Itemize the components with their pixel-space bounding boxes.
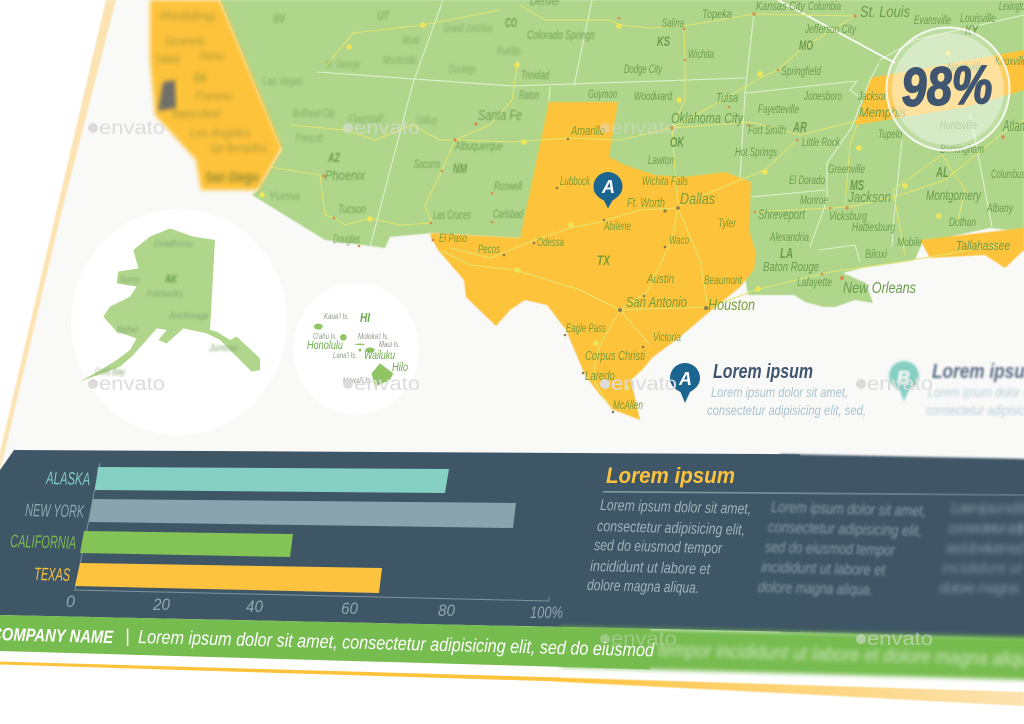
map labels: central and southeast: Vicksburg (829, 211, 867, 223)
text column 2: incididunt ut labore et (761, 559, 886, 579)
blurred map labels: interior west (263, 8, 521, 203)
Alaska labels: Bethel (117, 325, 139, 336)
map labels: central and southeast: AR (792, 119, 807, 136)
map labels: central and southeast: Jackson (847, 189, 891, 206)
map labels: Texas (439, 123, 755, 412)
map labels: Texas: Waco (669, 235, 689, 247)
blurred map labels: interior west: Prescott (296, 131, 323, 145)
map labels: Texas: Houston (708, 297, 755, 314)
map labels: southwest (325, 0, 595, 246)
icon: grey bay blob (158, 80, 176, 111)
map labels: central and southeast: Albany (986, 203, 1014, 215)
map labels: central and southeast: Alexandria (769, 232, 809, 244)
blurred map labels: interior west: Yuma (268, 189, 300, 203)
icon: map pin A: A (601, 177, 615, 197)
blurred map labels: California and Nevada: San Diego (205, 169, 259, 186)
legend description: consectetur adipisicing elit, sed, (707, 402, 866, 418)
Hawaii labels: Moloka'i Is. (358, 331, 389, 341)
Alaska shape (80, 228, 260, 382)
blurred map labels: California and Nevada: Oakland (155, 52, 180, 66)
blurred map labels: interior west: Monticello (383, 53, 417, 67)
map labels: central and southeast: Montgomery (926, 187, 982, 203)
Texas city dots (503, 138, 708, 413)
map labels: central and southeast: Nashville (947, 62, 985, 74)
map labels: central and southeast: Mobile (897, 237, 922, 249)
map labels: central and southeast: Salina (662, 18, 684, 30)
blurred map labels: California and Nevada: Bakersfield (172, 107, 220, 121)
legend description (926, 384, 1024, 418)
land: green states (220, 0, 1024, 307)
map labels: central and southeast: Little Rock (802, 137, 841, 149)
map labels: central and southeast: Lafayette (797, 277, 832, 289)
text column 2: consectetur adipisicing elit, (768, 519, 922, 540)
axis tick labels: 40 (246, 597, 263, 616)
highway shields (259, 22, 951, 391)
map labels: southwest: Socorro (414, 159, 440, 171)
legend description: Lorem ipsum dolor sit amet, (711, 384, 848, 400)
blurred map labels: California and Nevada: Reno (200, 49, 225, 63)
map labels: southwest: Trinidad (521, 70, 549, 82)
state: Florida (920, 228, 1024, 268)
map labels: central and southeast: Woodward (634, 91, 672, 103)
axis tick labels (66, 592, 563, 622)
roads (270, 5, 1024, 410)
watermarks: envato (611, 374, 677, 395)
Alaska labels (95, 239, 238, 378)
map labels: Texas: San Antonio (626, 294, 687, 311)
map labels: Texas: Corpus Christi (585, 348, 646, 363)
text column 3: sed do eiusmod (945, 540, 1024, 557)
watermarks: envato (867, 629, 933, 650)
map labels: central and southeast: Oklahoma City (671, 110, 744, 127)
blurred map labels: interior west: Pueblo (497, 44, 521, 58)
blurred map labels: California and Nevada: Redding (160, 9, 215, 23)
city dots (322, 12, 1005, 280)
Hawaii labels: Lana'i Is. (333, 350, 357, 360)
panel: green footer band (0, 615, 1024, 680)
map labels: central and southeast: KS (657, 33, 670, 49)
axis tick labels: 100% (530, 603, 563, 622)
map labels: Texas: Ft. Worth (627, 195, 665, 210)
blurred map labels: California and Nevada: Los Angeles (190, 126, 250, 140)
map labels: central and southeast: MS (850, 177, 864, 194)
map labels: Texas: Dallas (680, 191, 715, 208)
Alaska labels: AK (164, 272, 178, 286)
legend item B (889, 361, 1024, 418)
legend description (707, 384, 866, 418)
blurred map labels: California and Nevada: San Bernardino (210, 141, 267, 155)
map labels: central and southeast: Baton Rouge (763, 259, 819, 274)
panel heading: Lorem ipsum (606, 463, 735, 488)
axis lines (75, 463, 549, 601)
state: Texas (430, 102, 756, 420)
state: California (150, 0, 282, 190)
map labels: central and southeast: Monroe (800, 195, 828, 207)
text column 2 (758, 499, 926, 599)
map labels: Texas: Abilene (603, 221, 631, 233)
map labels: central and southeast: Guymon (588, 89, 617, 101)
map labels: southwest: Albuquerque (454, 141, 503, 153)
legend item A (670, 361, 866, 418)
map labels: Texas: El Paso (439, 233, 467, 245)
axis tick labels: 80 (438, 601, 455, 620)
watermarks: envato (99, 374, 165, 395)
text column 1: sed do eiusmod tempor (594, 537, 723, 557)
watermarks: envato (354, 374, 420, 395)
panel: dark chart and text band (0, 450, 1024, 640)
map labels: central and southeast (588, 1, 1024, 297)
icon: legend pin B: B (897, 368, 910, 388)
Alaska labels: Cold Bay (95, 367, 126, 378)
state borders (317, 0, 1024, 262)
map labels: central and southeast: Hattiesburg (852, 222, 895, 234)
blurred map labels: interior west: Flagstaff (348, 112, 384, 126)
map labels: central and southeast: Lawton (648, 155, 674, 167)
map labels: central and southeast: Greenville (828, 164, 865, 176)
map labels: central and southeast: Louisville (960, 13, 996, 25)
map labels: central and southeast: El Dorado (789, 175, 825, 187)
map labels: central and southeast: Jefferson City (804, 24, 857, 36)
blurred map labels: California and Nevada: Sacramento (165, 34, 205, 48)
bar labels: TEXAS (34, 564, 70, 585)
Hawaii labels: Honolulu (307, 338, 343, 352)
map labels: southwest: CO (505, 15, 517, 30)
map labels: central and southeast: Columbia (808, 1, 841, 13)
Hawaii labels: O'ahu Is. (313, 331, 337, 341)
map labels: central and southeast: KY (965, 22, 979, 38)
map labels: central and southeast: Birmingham (940, 144, 984, 156)
map labels: central and southeast: Jonesboro (803, 91, 842, 103)
map labels: central and southeast: AL (935, 164, 949, 181)
text column 2: sed do eiusmod tempor (765, 539, 896, 559)
map: contiguous states (150, 0, 1024, 420)
blurred map labels: interior west: Durango (449, 62, 476, 76)
blurred map labels: interior west: UT (377, 8, 390, 23)
bar: Texas (75, 563, 382, 593)
map labels: central and southeast: St. Louis (860, 4, 910, 21)
map labels: Texas: TX (597, 252, 611, 268)
Hawaii labels: Hawai'i Is. (343, 375, 372, 385)
inset: Alaska (71, 209, 287, 435)
map labels: southwest: Phoenix (325, 167, 366, 183)
map labels: central and southeast: Springfield (781, 66, 821, 78)
blurred map labels: interior west: Grand Junction (443, 21, 493, 35)
text column 1: Lorem ipsum dolor sit amet, (600, 497, 751, 518)
map labels: southwest: NM (453, 160, 467, 176)
map labels: Texas: McAllen (613, 400, 643, 412)
map labels: central and southeast: Tupelo (878, 129, 902, 141)
bar labels: NEW YORK (25, 500, 85, 522)
axis tick labels: 60 (341, 599, 358, 618)
Alaska labels: Fairbanks (147, 289, 183, 300)
text column 1: consectetur adipisicing elit, (597, 518, 745, 539)
text column 3 (939, 500, 1024, 597)
callout: 98% magnifier (886, 28, 1010, 150)
map labels: central and southeast: Dodge City (624, 64, 663, 76)
map labels: central and southeast: OK (670, 134, 685, 151)
Hawaii labels: Wailuku (364, 348, 395, 362)
pointer line (778, 0, 895, 63)
map labels: central and southeast: Huntsville (940, 120, 977, 132)
page background (0, 0, 1024, 470)
map labels: central and southeast: MO (799, 37, 813, 53)
map labels: central and southeast: Fayetteville (758, 104, 799, 116)
map labels: Texas: Amarillo (570, 123, 605, 138)
text column 2: dolore magna aliqua. (758, 579, 873, 599)
watermarks: envato (611, 629, 677, 650)
map labels: Texas: Austin (646, 271, 674, 286)
Alaska labels: Juneau (208, 343, 238, 354)
map labels: southwest: Santa Fe (478, 107, 522, 124)
map labels: southwest: AZ (327, 150, 341, 165)
legend heading: Lorem ipsum (713, 361, 813, 383)
blurred map labels: California and Nevada (155, 9, 267, 186)
map labels: Texas: Victoria (653, 332, 681, 344)
bar labels (10, 468, 90, 585)
watermarks (88, 118, 933, 650)
text column 3: incididunt ut (942, 560, 1023, 577)
map labels: central and southeast: Topeka (702, 9, 732, 21)
icon: map pin A (594, 172, 622, 208)
map labels: southwest: Las Cruces (433, 210, 471, 222)
map labels: southwest: Tucson (338, 204, 366, 216)
map labels: central and southeast: Tulsa (716, 90, 738, 105)
map labels: Texas: Odessa (537, 237, 564, 249)
map labels: central and southeast: Wichita (688, 49, 714, 61)
map labels: Texas: Wichita Falls (642, 176, 688, 188)
map labels: central and southeast: Jackson (857, 91, 888, 103)
icon: legend pin A: A (678, 369, 692, 389)
blurred map labels: interior west: Moab (402, 33, 420, 47)
bar: Alaska (95, 467, 449, 493)
map labels: central and southeast: New Orleans (843, 280, 916, 297)
stat: 98 percent: 98% (900, 55, 993, 118)
map labels: central and southeast: Shreveport (758, 206, 806, 222)
Hawaii labels (307, 310, 408, 385)
Alaska labels: Anchorage (168, 311, 209, 322)
watermarks: envato (867, 374, 933, 395)
blurred map labels: interior west: NV (273, 11, 286, 26)
icon: legend pin A (670, 363, 700, 403)
axis tick labels: 0 (66, 592, 76, 611)
bar chart (10, 463, 563, 622)
map labels: southwest: Colorado Springs (527, 30, 595, 42)
blurred map labels: California and Nevada: CA (194, 71, 206, 85)
map labels: central and southeast: Fort Smith (748, 125, 786, 137)
blurred map labels: interior west: Gallup (416, 113, 437, 127)
map labels: Texas: Eagle Pass (566, 323, 606, 335)
map labels: central and southeast: LA (780, 245, 793, 262)
map labels: southwest: Douglas (333, 234, 360, 246)
Alaska labels: Nome (120, 275, 140, 286)
Alaska labels: Deadhorse (154, 239, 193, 250)
map labels: Texas: Tyler (718, 218, 737, 230)
map labels: central and southeast: Memphis (859, 104, 906, 120)
heading rule (603, 491, 1024, 496)
bar: New York (89, 499, 516, 528)
map labels: central and southeast: Tallahassee (956, 238, 1010, 253)
Hawaii islands (314, 324, 393, 387)
map labels: central and southeast: Evansville (914, 15, 951, 27)
footer text: Lorem ipsum dolor sit amet, consectetur adipisicing elit, sed do eiusmod (138, 627, 655, 662)
bar labels: ALASKA (45, 468, 90, 489)
Hawaii labels: Hilo (392, 360, 408, 374)
bar: California (80, 531, 293, 557)
blurred map labels: interior west: St. George (325, 57, 360, 71)
map labels: central and southeast: Hot Springs (735, 147, 777, 159)
map labels: Texas: Beaumont (704, 275, 743, 287)
Hawaii labels: Maui Is. (379, 339, 400, 349)
blurred map labels: California and Nevada: Fresno (195, 89, 233, 103)
map labels: Texas: Pecos (478, 244, 500, 256)
Hawaii labels: Kaua'i Is. (324, 311, 349, 321)
text column 1: dolore magna aliqua. (587, 577, 699, 597)
inset: Hawaii (293, 283, 419, 415)
bar labels: CALIFORNIA (10, 531, 76, 553)
text column 1: incididunt ut labore et (590, 558, 711, 578)
page border stripe (0, 0, 116, 470)
map labels: southwest: Carlsbad (493, 209, 523, 221)
map labels: southwest: Raton (519, 90, 539, 102)
map labels: central and southeast: Dothan (949, 217, 976, 229)
blurred map labels: interior west: Las Vegas (263, 74, 303, 88)
text column 3: dolore magna (939, 580, 1019, 597)
map labels: central and southeast: Kansas City (756, 1, 806, 13)
text column 2: Lorem ipsum dolor sit amet, (771, 499, 926, 520)
watermarks: envato (611, 118, 677, 139)
watermarks: envato (354, 118, 420, 139)
state: Tennessee (855, 50, 1024, 125)
axis tick labels: 20 (152, 595, 170, 614)
watermarks: envato (99, 118, 165, 139)
page border bottom line (0, 662, 1024, 706)
text column 1 (587, 497, 751, 597)
icon: legend pin B (889, 361, 919, 401)
Hawaii labels: HI (360, 310, 370, 325)
map labels: southwest: Roswell (494, 181, 522, 193)
map labels: Texas: Lubbock (560, 176, 591, 188)
map labels: central and southeast: Biloxi (865, 249, 887, 261)
separator: | (125, 626, 130, 646)
map labels: Texas: Laredo (585, 368, 615, 383)
blurred map labels: interior west: Bullhead City (293, 106, 336, 120)
